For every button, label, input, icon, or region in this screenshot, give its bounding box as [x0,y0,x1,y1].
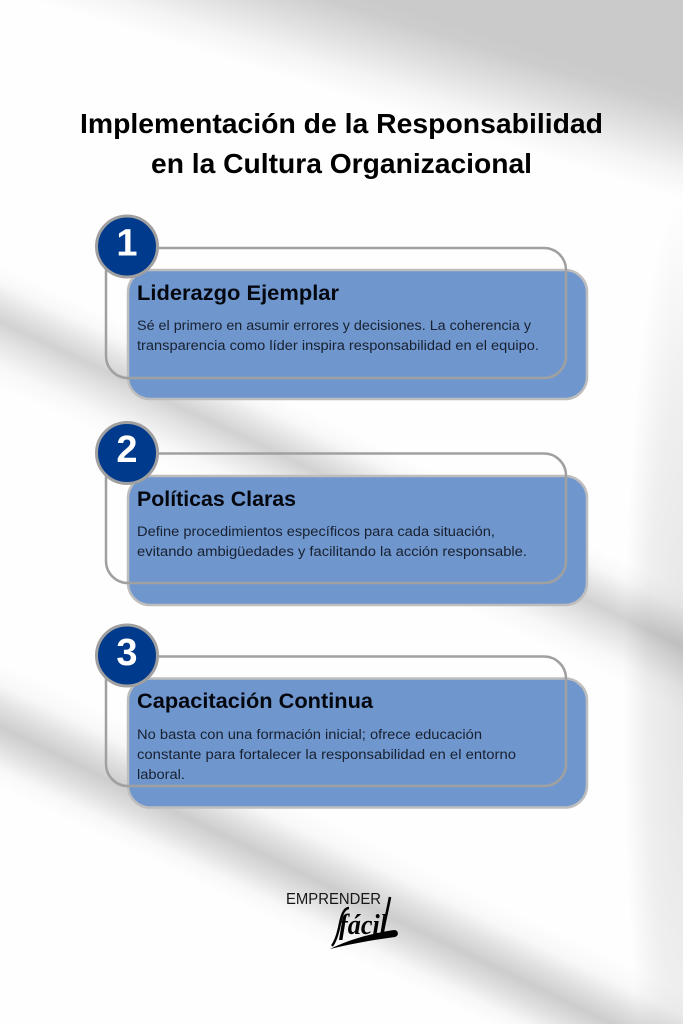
badge: number 3 [96,625,158,686]
outline frame [106,656,566,786]
body text: step 1: transparencia como líder inspira responsabilidad en el equipo. [137,338,539,353]
logo: Emprender Fácil: fácil [339,910,387,941]
badge: number 1: 1 [116,222,138,264]
card: Capacitación Continua [128,678,587,808]
logo: Emprender Fácil [286,891,398,949]
body text: step 2: evitando ambigüedades y facilitando la acción responsable. [137,544,527,559]
card: Políticas Claras [128,476,587,605]
body text: step 3: laboral. [137,767,185,782]
body text: step 3 [137,727,516,782]
heading: Políticas Claras: Políticas Claras [137,487,296,511]
panel: step 2 [96,422,587,605]
body text: step 2 [137,524,527,559]
outline frame [106,454,566,583]
title [80,108,603,179]
panel: step 3 [96,625,587,808]
title: en la Cultura Organizacional [151,148,532,179]
title: Implementación de la Responsabilidad [80,108,603,139]
badge: number 2: 2 [116,429,138,471]
badge: number 1 [96,216,158,277]
outline frame [106,248,566,378]
body text: step 1: Sé el primero en asumir errores y decisiones. La coherencia y [137,318,531,333]
heading: Capacitación Continua: Capacitación Continua [137,689,374,713]
logo: Emprender Fácil: EMPRENDER [286,891,381,908]
body text: step 3: No basta con una formación inicial; ofrece educación [137,727,482,742]
panel: step 1 [96,216,587,399]
body text: step 1 [137,318,539,353]
card: Liderazgo Ejemplar [128,270,587,399]
badge: number 3: 3 [116,632,138,674]
heading: Liderazgo Ejemplar: Liderazgo Ejemplar [137,281,340,305]
badge: number 2 [96,422,158,484]
body text: step 3: constante para fortalecer la responsabilidad en el entorno [137,747,516,762]
body text: step 2: Define procedimientos específicos para cada situación, [137,524,495,539]
